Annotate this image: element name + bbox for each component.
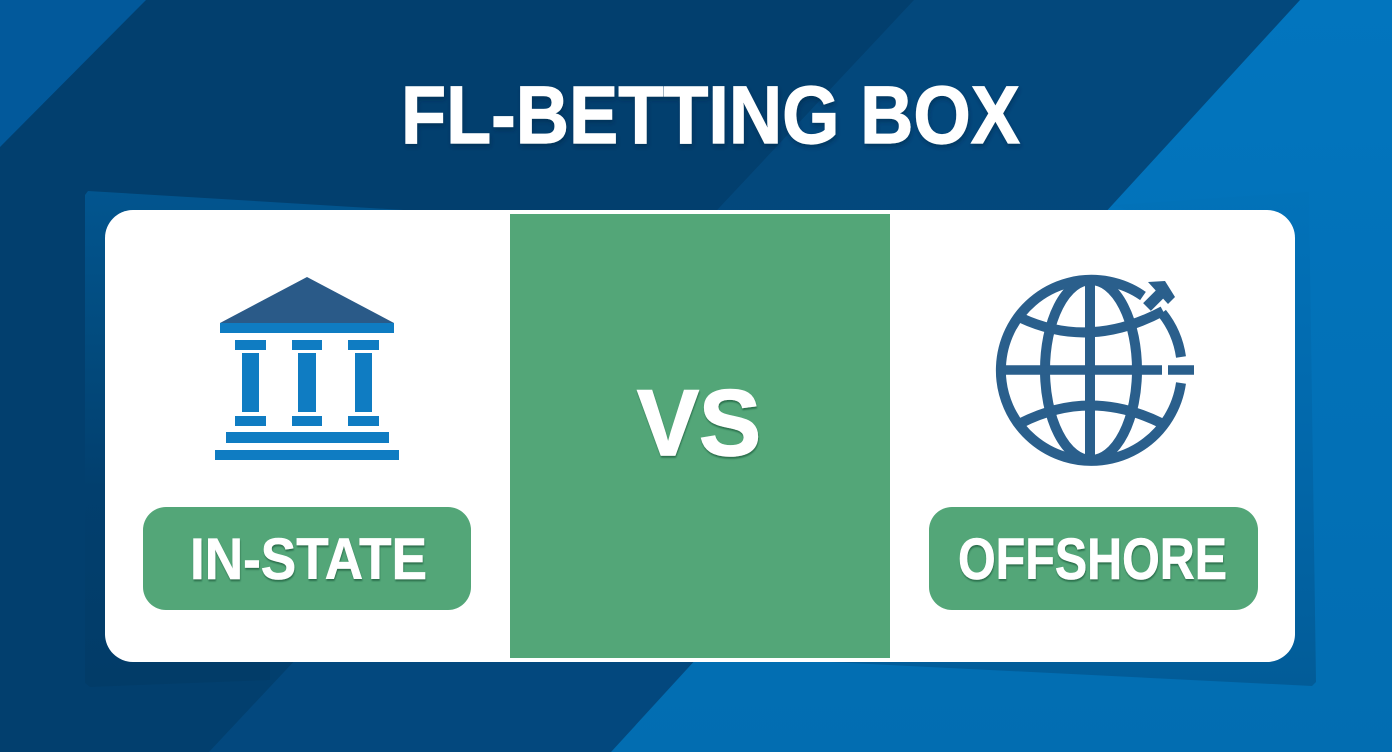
icon: globe with arrow bbox=[1001, 279, 1194, 461]
badge: offshore: OFFSHORE bbox=[958, 527, 1227, 592]
icon: government building bbox=[215, 277, 399, 460]
badge: in-state: IN-STATE bbox=[190, 527, 427, 592]
title: FL-BETTING BOX bbox=[401, 70, 1020, 161]
panel: VS centre bbox=[510, 214, 890, 658]
badge: offshore bbox=[929, 507, 1258, 610]
panel: comparison card bbox=[105, 210, 1295, 662]
badge: in-state bbox=[143, 507, 471, 610]
VS label: VS bbox=[637, 370, 761, 475]
tilted backing panel bbox=[85, 191, 1316, 687]
